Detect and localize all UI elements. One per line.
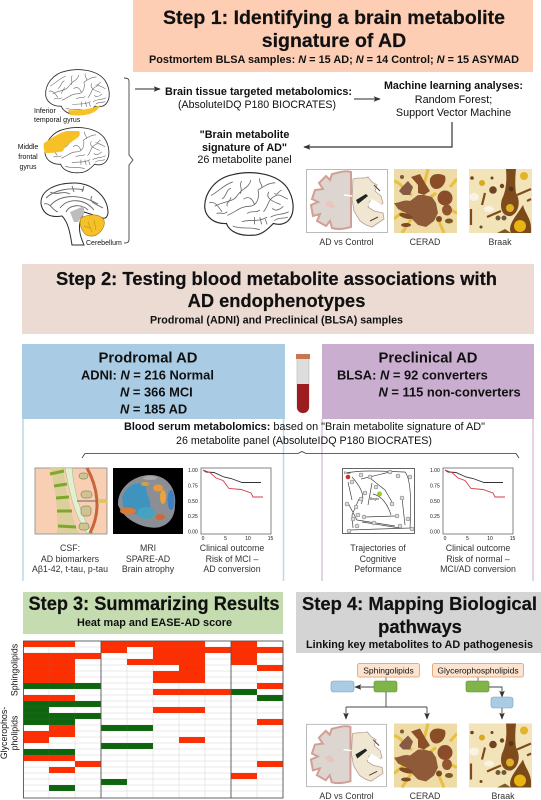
brace: left regions — [124, 78, 133, 243]
panel: step 2 header — [22, 264, 534, 334]
arrow: machine learning to signature — [304, 122, 452, 147]
image: MRI brain: SPARE-AD — [126, 554, 170, 564]
image: CSF spine: CSF: — [60, 543, 80, 553]
box: glycerophospholipids: Glycerophospholipids — [437, 666, 519, 676]
brace: blood analyses — [82, 452, 519, 458]
text: brain metabolite signature — [197, 129, 292, 166]
text: brain metabolite signature: "Brain metabolite — [200, 129, 289, 141]
label: sphingolipids: Sphingolipids — [10, 643, 20, 696]
icon: brain middle frontal gyrus: gyrus — [19, 164, 37, 171]
text: blood serum metabolomics — [124, 421, 485, 447]
panel: step 4 header: Linking key metabolites to AD pathogenesis — [306, 639, 533, 651]
arrow: metabolomics to machine learning — [354, 98, 380, 100]
panel: step 4 header — [296, 592, 541, 653]
image: CSF spine: Aβ1-42, t-tau, p-tau — [32, 564, 108, 574]
title: step 2 — [56, 268, 497, 311]
text: machine learning analyses: Machine learning analyses: — [384, 80, 523, 92]
icon: brain middle frontal gyrus: Middle — [18, 144, 38, 151]
image: CERAD — [394, 169, 457, 247]
panel: step 3 header: Step 3: Summarizing Results — [28, 594, 280, 615]
panel: preclinical AD: Preclinical AD — [379, 350, 478, 366]
image: AD vs control step 4 — [306, 724, 387, 800]
arrow: regions to metabolomics — [135, 88, 160, 90]
chart: clinical outcome MCI to AD: AD conversion — [203, 564, 261, 574]
icon: brain middle frontal gyrus — [18, 128, 109, 173]
chart: clinical outcome MCI to AD — [188, 468, 273, 574]
icon: brain inferior temporal gyrus: Inferior — [34, 108, 56, 115]
panel: step 3 header: Heat map and EASE-AD score — [77, 617, 232, 629]
chart: clinical outcome normal to MCI/AD: MCI/AD conversion — [440, 564, 516, 574]
panel: prodromal AD: ADNI: N = 216 Normal — [81, 368, 214, 382]
image: MRI brain: Brain atrophy — [122, 564, 175, 574]
text: brain tissue metabolomics: Brain tissue targeted metabolomics: — [165, 86, 352, 98]
panel: prodromal AD: N = 185 AD — [120, 402, 187, 416]
title: step 1: signature of AD — [262, 30, 406, 52]
chart: clinical outcome normal to MCI/AD: Clinical outcome — [446, 543, 510, 553]
icon: brain inferior temporal gyrus: temporal gyrus — [34, 117, 81, 124]
icon: brain inferior temporal gyrus — [34, 70, 109, 124]
image: MRI brain — [113, 468, 183, 574]
diagram: trajectories of cognitive performance: Trajectories of — [350, 543, 406, 553]
image: CERAD step 4 — [394, 724, 457, 800]
step 2 subtitle: Prodromal (ADNI) and Preclinical (BLSA) samples — [150, 314, 403, 326]
image: MRI brain: MRI — [140, 543, 156, 553]
icon: brain cerebellum — [41, 183, 122, 247]
image: CSF spine: AD biomarkers — [41, 554, 100, 564]
image: AD vs control — [306, 170, 388, 247]
panel: preclinical AD: BLSA: N = 92 converters — [337, 368, 488, 382]
box: sphingolipids — [358, 664, 420, 677]
diagram: trajectories of cognitive performance: End — [344, 471, 350, 475]
panel: step 3 header — [23, 592, 283, 634]
text: brain metabolite signature: signature of AD" — [202, 142, 287, 154]
panel: preclinical AD: N = 115 non-converters — [378, 384, 521, 400]
image: Braak: Braak — [489, 237, 512, 247]
panel: prodromal AD: N = 366 MCI — [120, 384, 193, 400]
icon: brain middle frontal gyrus: frontal — [18, 154, 38, 161]
diagram: trajectories of cognitive performance: Begin — [370, 497, 379, 501]
icon: brain cerebellum: Cerebellum — [86, 240, 122, 247]
chart: clinical outcome normal to MCI/AD — [430, 468, 516, 574]
image: Braak step 4 — [469, 724, 532, 800]
panel: step 4 header: pathways — [378, 616, 462, 637]
image: Braak — [469, 169, 532, 247]
text: machine learning analyses: Support Vector Machine — [396, 107, 511, 119]
icon: blood tube — [296, 354, 310, 413]
title: step 1 — [163, 7, 505, 52]
panel: prodromal AD — [22, 344, 285, 419]
title: step 2: AD endophenotypes — [188, 290, 365, 311]
panel: prodromal AD: Prodromal AD — [99, 350, 198, 366]
box: sphingolipids: Sphingolipids — [363, 666, 414, 676]
panel: step 1 header — [133, 0, 533, 72]
heat map — [23, 641, 283, 798]
pathway diagram — [331, 664, 524, 719]
text: brain tissue metabolomics: (AbsoluteIDQ P180 BIOCRATES) — [178, 99, 336, 111]
diagram: trajectories of cognitive performance: Peformance — [354, 564, 402, 574]
title: step 2: Step 2: Testing blood metabolite associations with — [56, 268, 497, 289]
text: machine learning analyses: Random Forest; — [415, 94, 492, 106]
panel: preclinical AD — [322, 344, 534, 419]
text: blood serum metabolomics: 26 metabolite panel (AbsoluteIDQ P180 BIOCRATES) — [176, 435, 432, 447]
chart: clinical outcome MCI to AD: Clinical outcome — [200, 543, 264, 553]
image: AD vs control: AD vs Control — [319, 237, 374, 247]
box: glycerophospholipids — [432, 664, 524, 677]
image: CERAD: CERAD — [410, 237, 440, 247]
chart: clinical outcome MCI to AD: Risk of MCI – — [206, 554, 258, 564]
text: brain tissue metabolomics — [165, 86, 352, 111]
text: blood serum metabolomics: Blood serum metabolomics: based on "Brain metabolite signature of AD" — [124, 421, 485, 433]
icon: large brain — [205, 173, 293, 235]
chart: clinical outcome normal to MCI/AD: Risk of normal – — [446, 554, 510, 564]
diagram: trajectories of cognitive performance — [342, 468, 414, 574]
diagram: trajectories of cognitive performance: Cognitive — [360, 554, 396, 564]
label: glycerophospholipids: pholipids — [10, 715, 20, 750]
label: glycerophospholipids — [0, 707, 20, 759]
text: brain metabolite signature: 26 metabolite panel — [197, 154, 292, 166]
step 1 samples subtitle: Postmortem BLSA samples: N = 15 AD; N = 14 Control; N = 15 ASYMAD — [149, 54, 519, 66]
text: machine learning analyses — [384, 80, 523, 119]
title: step 1: Step 1: Identifying a brain metabolite — [163, 7, 505, 29]
panel: step 4 header: Step 4: Mapping Biological — [302, 593, 537, 614]
image: CSF spine — [32, 468, 108, 574]
